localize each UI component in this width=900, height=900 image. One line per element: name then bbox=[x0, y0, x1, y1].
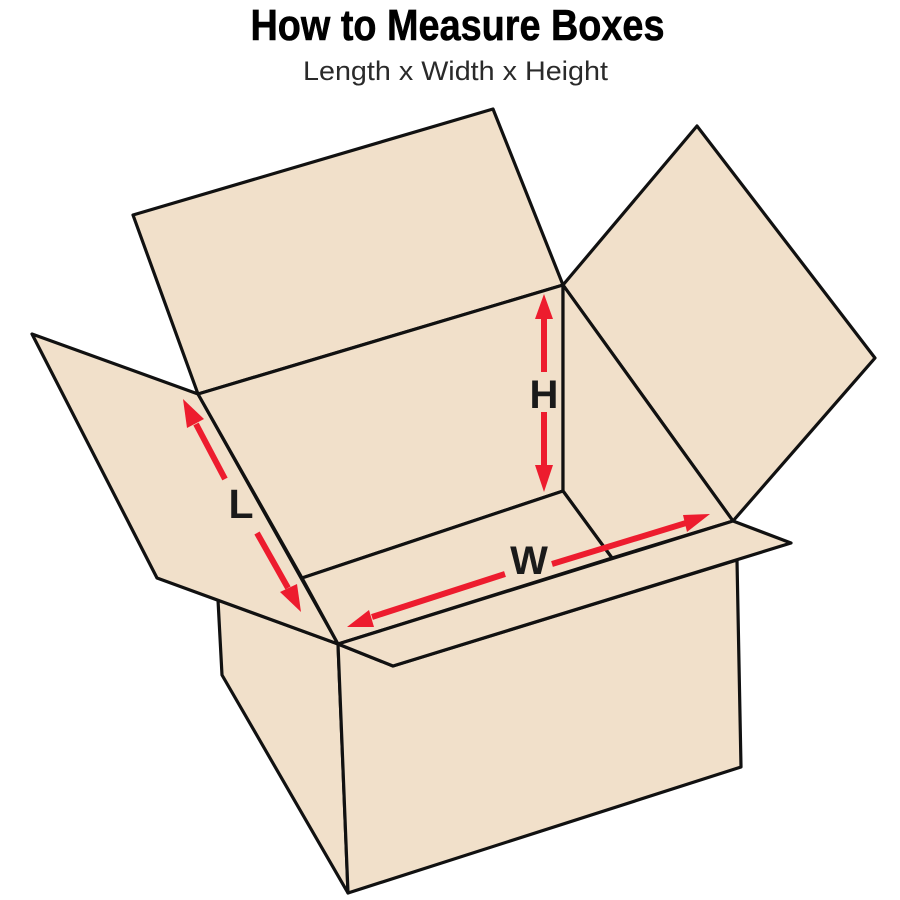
box interior back wall bbox=[198, 285, 563, 578]
label: L: L bbox=[228, 481, 254, 527]
box interior right wall bbox=[563, 285, 733, 558]
front flap bbox=[338, 521, 791, 666]
arrow: length bbox=[183, 399, 301, 612]
back flap bbox=[133, 109, 563, 394]
subtitle: Length x Width x Height bbox=[303, 56, 609, 86]
label: W: W bbox=[510, 539, 548, 583]
arrow: width bbox=[347, 514, 710, 627]
label: H: H bbox=[530, 373, 558, 417]
front outer side bbox=[338, 560, 741, 893]
left flap bbox=[32, 334, 338, 644]
right flap bbox=[563, 126, 875, 521]
title: How to Measure Boxes bbox=[250, 1, 664, 50]
left outer side bbox=[218, 600, 348, 893]
arrow: height bbox=[535, 294, 553, 492]
box interior floor bbox=[302, 491, 612, 644]
